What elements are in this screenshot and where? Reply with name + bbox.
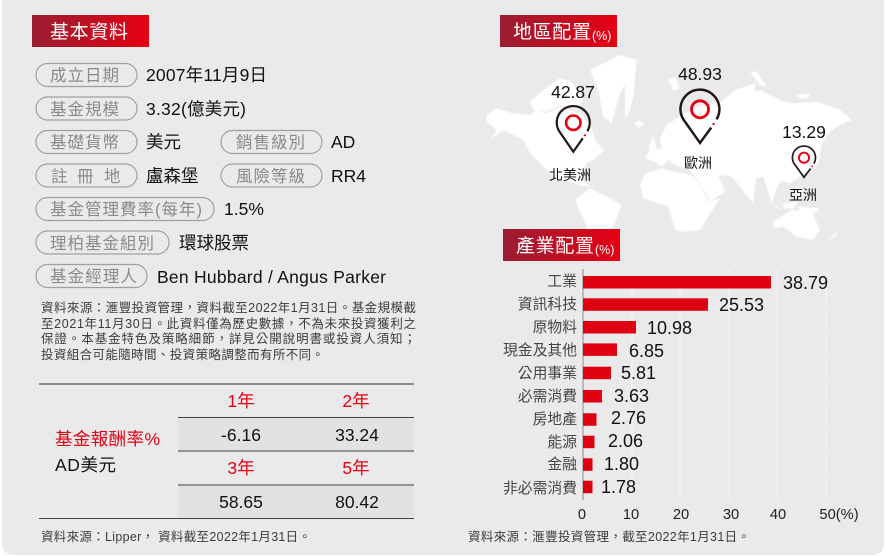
bar chart: sector allocation: 公用事業 (518, 365, 577, 382)
info row: inception date (36, 64, 267, 86)
pin: North America: 42.87 (551, 82, 595, 102)
table source note: 資料來源：Lipper， 資料截至2022年1月31日。 (41, 530, 311, 544)
info row: domicile: 盧森堡 (146, 166, 198, 186)
bar chart: sector allocation: 現金及其他 (503, 342, 577, 359)
performance table: -6.16 (221, 425, 261, 445)
pin: North America (549, 82, 595, 183)
bar chart: sector allocation: 6.85 (629, 341, 664, 361)
info row: fund size: 3.32(億美元) (146, 99, 246, 119)
info row: share class: 銷售級別 (236, 133, 305, 152)
pin: Asia (782, 122, 826, 203)
info row: fund size: 基金規模 (50, 100, 119, 119)
pin: North America: 北美洲 (549, 167, 591, 183)
bar chart: sector allocation: 25.53 (719, 295, 764, 315)
bar chart: sector allocation: 40 (770, 507, 786, 523)
info row: fund managers: Ben Hubbard / Angus Parker (157, 267, 386, 287)
info row: risk rating: RR4 (331, 166, 366, 186)
info row: risk rating: 風險等級 (236, 167, 305, 186)
bar chart: sector allocation: 2.06 (608, 431, 643, 451)
info row: fund managers (36, 264, 386, 288)
heading: regional allocation: 地區配置 (513, 21, 591, 43)
pin: Europe (678, 64, 722, 171)
heading: sector allocation: 產業配置 (516, 235, 594, 257)
bar chart: sector allocation: 能源 (547, 434, 577, 451)
pin: Europe: 48.93 (678, 64, 722, 84)
info row: share class: AD (331, 132, 355, 152)
bar chart: sector allocation: 1.80 (604, 454, 639, 474)
bar chart: sector allocation: 0 (578, 507, 586, 523)
heading: sector allocation: (%) (595, 243, 614, 257)
source note: 投資組合可能隨時間、投資策略調整而有所不同。 (41, 347, 324, 362)
performance table (39, 384, 414, 519)
info row: management fee (36, 198, 264, 220)
info row: Lipper category (36, 231, 249, 254)
bar chart: sector allocation (503, 269, 859, 523)
pin: Europe: 歐洲 (684, 155, 712, 171)
info row: domicile: 註冊地 (51, 167, 120, 186)
info row: management fee: 基金管理費率(每年) (50, 200, 202, 219)
info row: Lipper category: 理柏基金組別 (50, 234, 154, 253)
info row: base currency: 基礎貨幣 (50, 133, 119, 152)
info row: management fee: 1.5% (224, 199, 264, 219)
heading: regional allocation: (%) (592, 29, 611, 43)
info row: fund size (36, 97, 246, 120)
bar chart: sector allocation: 2.76 (611, 408, 646, 428)
bar chart: sector allocation: 原物料 (533, 319, 577, 336)
bar chart: sector allocation: 10 (623, 507, 639, 523)
bar chart: sector allocation: 必需消費 (518, 388, 577, 405)
heading: basic data: 基本資料 (50, 21, 128, 43)
bar chart: sector allocation: 3.63 (614, 386, 649, 406)
source note: 保證。本基金特色及策略細節，詳見公開說明書或投資人須知； (41, 331, 416, 346)
bar chart: sector allocation: 5.81 (621, 363, 656, 383)
bar chart: sector allocation: 資訊科技 (518, 296, 577, 313)
bar chart: sector allocation: 20 (673, 507, 689, 523)
performance table: 3年 (227, 458, 255, 478)
heading: regional allocation (500, 15, 617, 47)
performance table: 58.65 (219, 492, 263, 512)
pin: Asia: 亞洲 (789, 187, 817, 203)
info row: risk rating (221, 164, 366, 187)
info row: base currency: 美元 (146, 132, 181, 152)
performance table: 33.24 (335, 425, 379, 445)
bar chart: sector allocation: 房地產 (533, 411, 577, 428)
info row: Lipper category: 環球股票 (179, 233, 249, 253)
performance table: AD美元 (55, 455, 116, 475)
bar chart: sector allocation: 30 (723, 507, 739, 523)
info row: domicile (36, 164, 198, 187)
source note: 資料來源：滙豐投資管理，資料截至2022年1月31日。基金規模截 (41, 300, 416, 315)
heading: basic data (32, 15, 149, 47)
source note (41, 300, 416, 362)
info row: base currency (36, 130, 181, 154)
info row: share class (221, 130, 355, 154)
performance table: 5年 (342, 458, 370, 478)
heading: sector allocation (503, 229, 620, 261)
performance table: 基金報酬率% (55, 429, 160, 449)
info row: fund managers: 基金經理人 (50, 267, 137, 286)
pin: Asia: 13.29 (782, 122, 826, 142)
info row: inception date: 2007年11月9日 (146, 65, 267, 85)
bar chart: sector allocation: 10.98 (647, 318, 692, 338)
bar chart: sector allocation: 非必需消費 (503, 480, 577, 497)
bar chart: sector allocation: 50(%) (819, 507, 859, 523)
source note: 至2021年11月30日。此資料僅為歷史數據，不為未來投資獲利之 (41, 316, 416, 331)
performance table: 2年 (342, 391, 370, 411)
info row: inception date: 成立日期 (50, 66, 119, 85)
bar chart: sector allocation: 1.78 (601, 477, 636, 497)
bar chart: sector allocation: 38.79 (783, 273, 828, 293)
performance table: 80.42 (335, 492, 379, 512)
chart source note: 資料來源：滙豐投資管理，截至2022年1月31日。 (468, 529, 750, 544)
world map (487, 55, 852, 250)
performance table: 1年 (227, 391, 255, 411)
bar chart: sector allocation: 工業 (547, 273, 577, 290)
bar chart: sector allocation: 金融 (547, 456, 577, 473)
